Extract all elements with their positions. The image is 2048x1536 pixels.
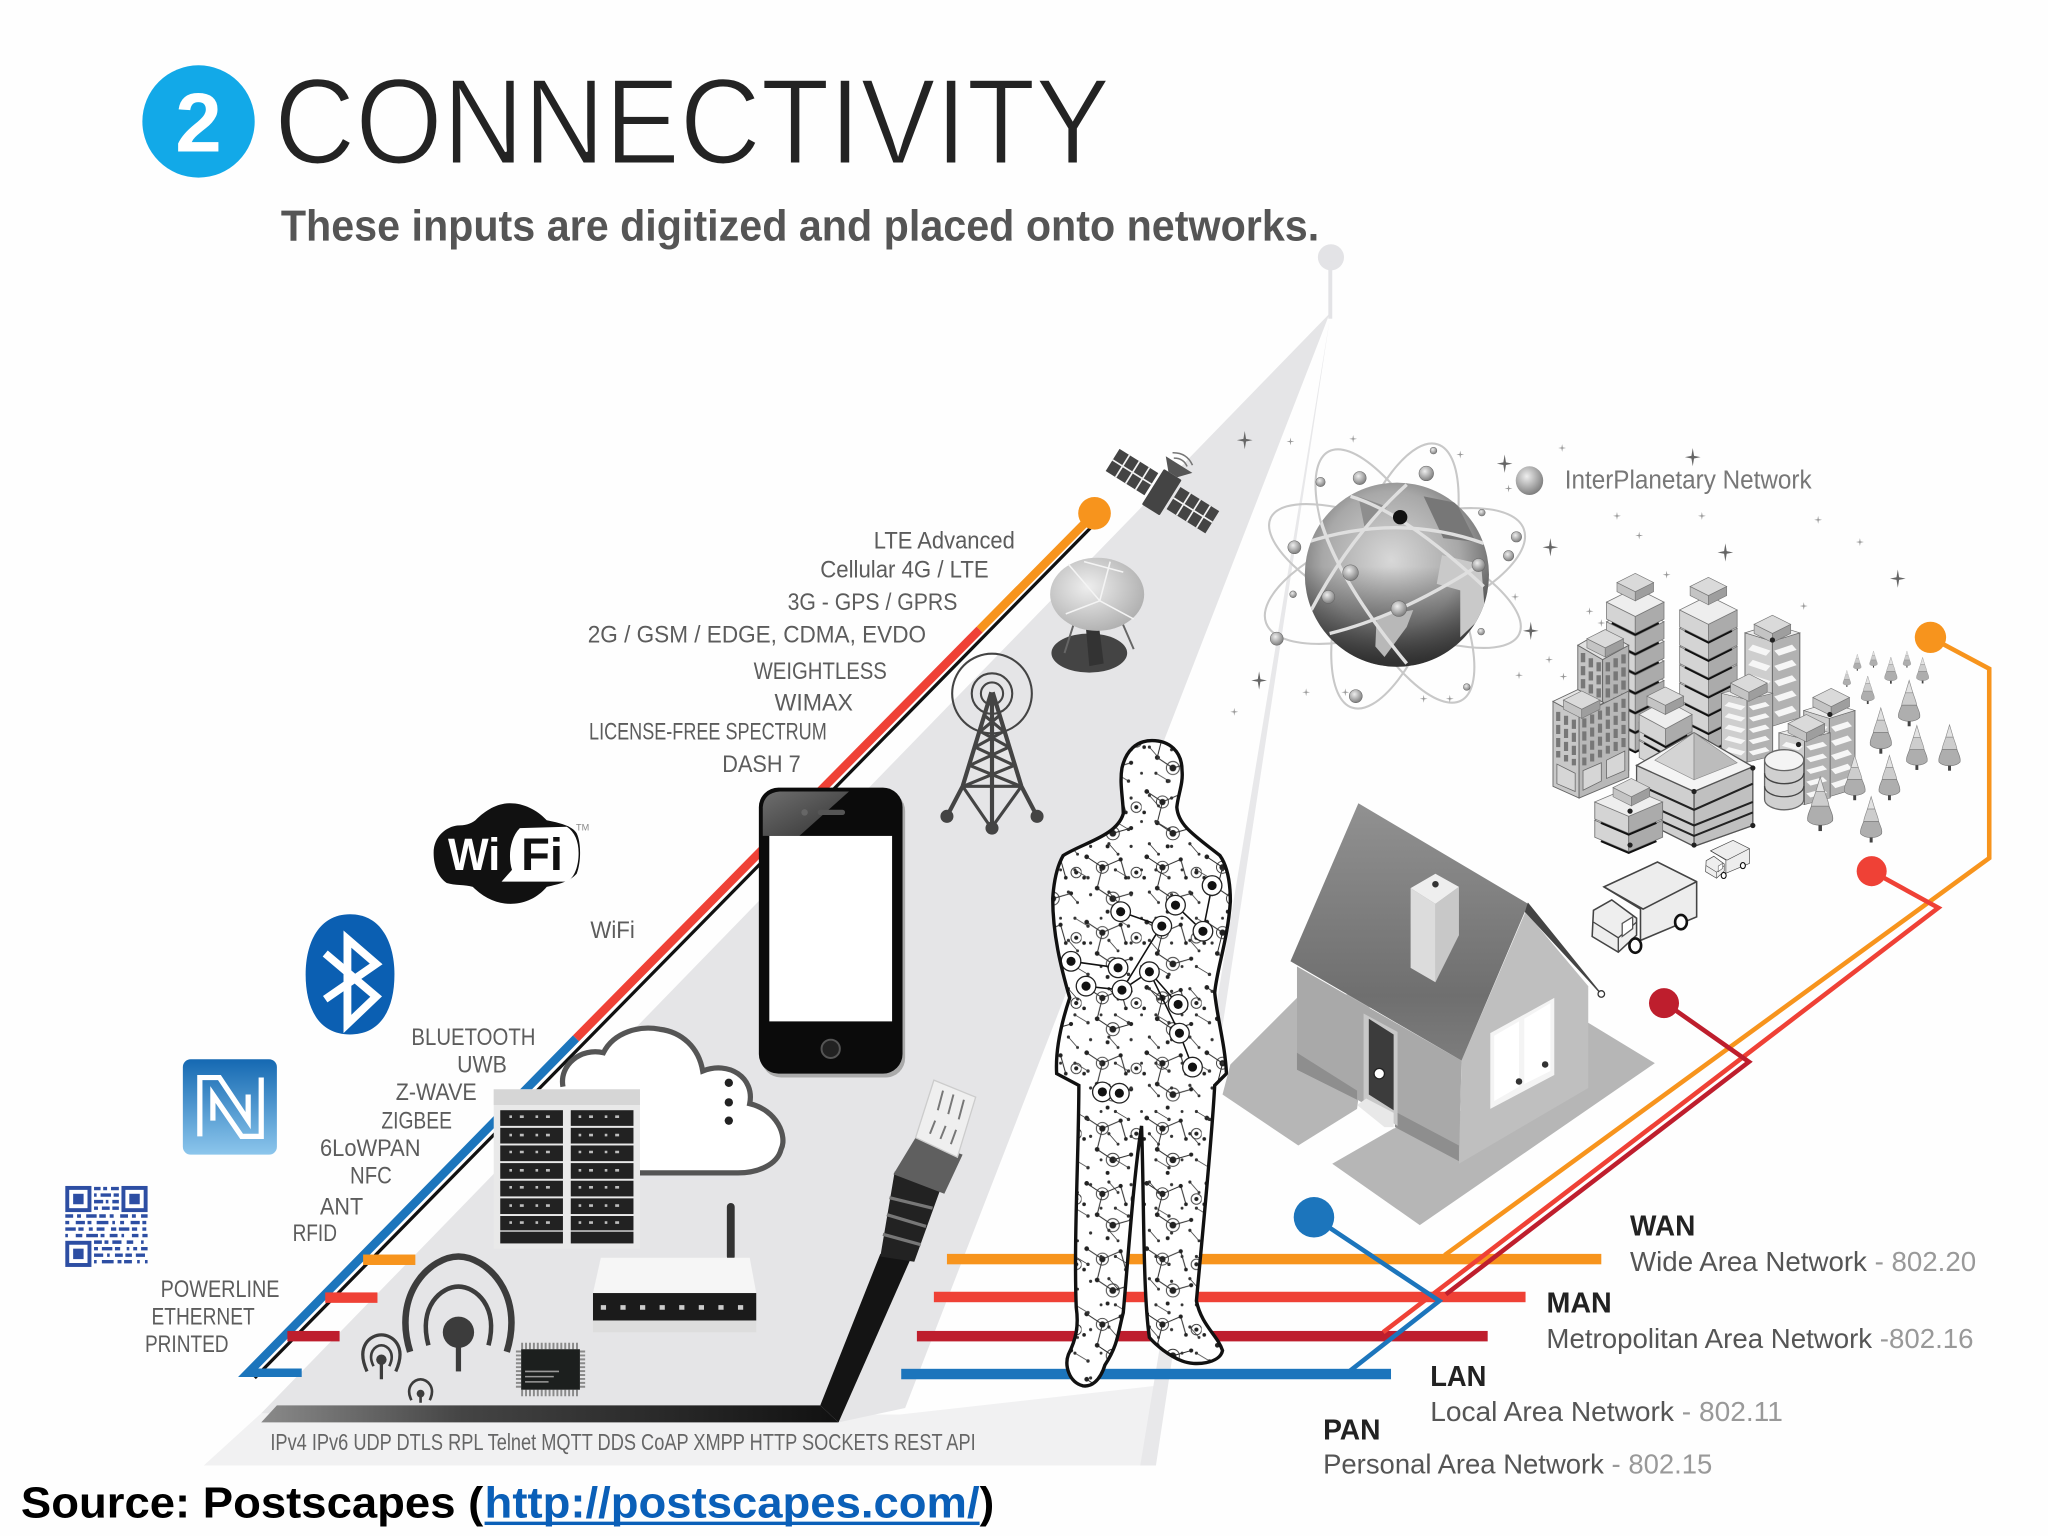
short range labels: RFID <box>293 1220 337 1247</box>
icon: MAN endpoint <box>1857 856 1887 886</box>
wire: WAN route <box>1445 637 1989 1255</box>
building corner markers <box>1627 637 1832 848</box>
source credit: http://postscapes.com/ <box>485 1479 980 1528</box>
title: CONNECTIVITY <box>274 53 1110 189</box>
figure: human network silhouette <box>1045 731 1241 1398</box>
icon: satellite dish <box>1050 558 1144 673</box>
icon: orange endpoint <box>1078 497 1111 530</box>
icon: beam top pin <box>1318 244 1344 319</box>
short range labels: NFC <box>350 1162 392 1189</box>
icon: smartphone <box>759 788 905 1078</box>
cellular and long range labels: DASH 7 <box>722 751 801 778</box>
short range labels: ZIGBEE <box>381 1107 452 1134</box>
label: MAN: MAN <box>1546 1288 1612 1320</box>
icon: WiFi logo: Wi <box>448 829 500 880</box>
icon: cloud <box>562 1028 783 1173</box>
icon: cell tower <box>941 654 1043 834</box>
black cable bar and ethernet plug <box>261 1080 976 1422</box>
cylinder block <box>1765 750 1804 810</box>
wired labels: POWERLINE <box>161 1276 280 1303</box>
mid rise blocks <box>1639 674 1855 805</box>
illustration: house <box>1223 803 1655 1225</box>
short range labels: 6LoWPAN <box>320 1135 421 1162</box>
label: LAN <box>1430 1361 1783 1427</box>
illustration: city skyline <box>1553 573 1855 853</box>
wired labels: ETHERNET <box>152 1303 255 1330</box>
left network stubs <box>287 1255 415 1341</box>
cellular and long range labels <box>588 528 1015 778</box>
icon: Bluetooth <box>306 914 394 1034</box>
icon: NFC <box>183 1059 277 1155</box>
cellular and long range labels: LICENSE-FREE SPECTRUM <box>589 718 827 745</box>
wire: MAN route <box>1383 871 1938 1332</box>
wired labels: PRINTED <box>145 1331 229 1358</box>
icon: dark red endpoint <box>1649 988 1679 1018</box>
protocol list: IPv4 IPv6 UDP DTLS RPL Telnet MQTT DDS CoAP XMPP HTTP SOCKETS REST API <box>270 1429 976 1455</box>
subtitle: These inputs are digitized and placed onto networks. <box>281 202 1319 250</box>
windowed office blocks <box>1553 630 1629 798</box>
label: LAN: Local Area Network - 802.11 <box>1430 1396 1783 1427</box>
cellular and long range labels: 2G / GSM / EDGE, CDMA, EVDO <box>588 622 926 649</box>
wire: blue route <box>1314 1217 1439 1371</box>
wire: dark red route <box>1446 1003 1749 1294</box>
cellular and long range labels: WIMAX <box>775 690 853 717</box>
short range labels: Z-WAVE <box>396 1079 477 1106</box>
source credit: ) <box>980 1479 994 1528</box>
right network bars <box>901 1254 1601 1379</box>
main coloured access line <box>248 513 1100 1378</box>
icon: planet <box>1516 466 1543 495</box>
icon: satellite <box>1101 425 1234 541</box>
label: WAN: WAN <box>1630 1211 1695 1243</box>
cellular and long range labels: WEIGHTLESS <box>754 658 887 685</box>
central pyramid block <box>1637 733 1753 846</box>
icon: small truck <box>1706 840 1749 879</box>
illustration: globe with orbits <box>1264 442 1526 710</box>
icon: number 2 badge: 2 <box>175 76 222 170</box>
icon: server rack <box>494 1089 640 1249</box>
source credit: Source: Postscapes ( <box>21 1479 484 1528</box>
cellular and long range labels: Cellular 4G / LTE <box>820 556 989 583</box>
ground slab <box>1223 993 1655 1225</box>
icon: number 2 badge <box>142 65 255 178</box>
label: MAN <box>1546 1288 1974 1354</box>
icon: QR code <box>65 1186 148 1267</box>
illustration: trees <box>1808 651 1960 843</box>
short range labels: ANT <box>320 1194 363 1221</box>
label: PAN <box>1323 1414 1712 1479</box>
cellular and long range labels: 3G - GPS / GPRS <box>788 589 957 616</box>
label: WAN: Wide Area Network - 802.20 <box>1630 1246 1976 1277</box>
icon: WAN endpoint <box>1915 622 1946 653</box>
icon: blue endpoint <box>1294 1197 1334 1238</box>
low block <box>1595 778 1663 853</box>
label: LAN: LAN <box>1430 1361 1486 1393</box>
label: PAN: Personal Area Network - 802.15 <box>1323 1448 1712 1479</box>
short range labels: BLUETOOTH <box>411 1024 536 1051</box>
label: MAN: Metropolitan Area Network -802.16 <box>1546 1323 1974 1354</box>
label: WAN <box>1630 1211 1976 1277</box>
short range labels: UWB <box>457 1051 507 1078</box>
icon: microchip <box>519 1346 583 1393</box>
cellular and long range labels: LTE Advanced <box>874 528 1015 555</box>
icon: WiFi logo: Fi <box>521 829 563 880</box>
source credit <box>21 1479 994 1528</box>
label: PAN: PAN <box>1323 1414 1381 1446</box>
icon: router <box>593 1203 756 1332</box>
panel: light floor band under the beam <box>204 320 1330 1465</box>
icon: WiFi logo <box>434 803 589 904</box>
panel: grey connectivity beam <box>261 313 1330 1422</box>
InterPlanetary label: InterPlanetary Network <box>1565 466 1812 494</box>
icon: large truck <box>1592 862 1697 953</box>
stars <box>1230 431 1906 716</box>
WiFi label: WiFi <box>590 917 635 944</box>
icon: wireless signal sensors <box>363 1256 511 1403</box>
short range labels <box>293 1024 536 1247</box>
stacked towers <box>1607 573 1800 752</box>
wired labels <box>145 1276 280 1358</box>
icon: WiFi logo: TM <box>576 823 589 833</box>
